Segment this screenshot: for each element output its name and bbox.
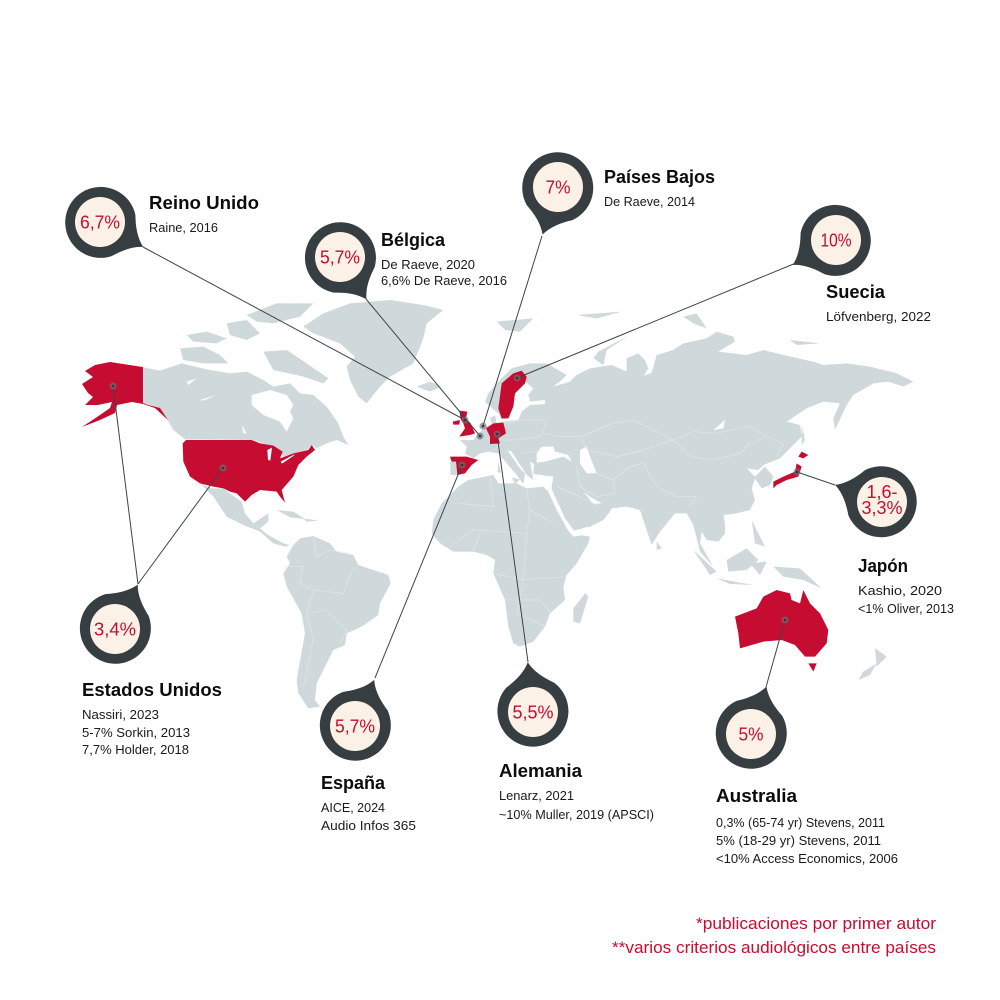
- label: Australia: <10% Access Economics, 2006: [716, 851, 898, 866]
- label: Suecia: Löfvenberg, 2022: [826, 309, 931, 324]
- label: Japón: <1% Oliver, 2013: [858, 601, 954, 616]
- pin: Estados Unidos: [68, 568, 169, 676]
- highlighted: contiguous United States: [183, 440, 315, 503]
- pin: Japón: 1,6-: [866, 482, 898, 502]
- label: Bélgica: De Raeve, 2020: [381, 257, 475, 272]
- country borders: [450, 420, 783, 627]
- label: Bélgica: [381, 230, 507, 288]
- Great Lakes: [267, 448, 295, 464]
- connector lines: [113, 236, 835, 687]
- South America borders: [283, 537, 353, 687]
- pin: Bélgica: [292, 209, 397, 318]
- land: Americas and Greenland: [143, 300, 443, 708]
- pin: Alemania: [492, 659, 572, 750]
- pin: Australia: 5%: [738, 724, 764, 744]
- label: Japón: Japón: [858, 556, 908, 576]
- label: Países Bajos: [604, 167, 715, 209]
- label: Suecia: Suecia: [826, 282, 886, 302]
- pin: Australia: [707, 675, 800, 778]
- label: Estados Unidos: 7,7% Holder, 2018: [82, 742, 189, 757]
- label: Reino Unido: Reino Unido: [149, 193, 259, 213]
- highlighted: Europe, Japan, Australia: [450, 371, 828, 672]
- label: Australia: 0,3% (65-74 yr) Stevens, 2011: [716, 815, 885, 830]
- label: Australia: Australia: [716, 786, 798, 806]
- label: Alemania: Lenarz, 2021: [499, 788, 574, 803]
- label: Japón: [858, 556, 954, 616]
- footnotes: [612, 914, 936, 957]
- label: Estados Unidos: Nassiri, 2023: [82, 707, 159, 722]
- label: Australia: 5% (18-29 yr) Stevens, 2011: [716, 833, 881, 848]
- label: Países Bajos: Países Bajos: [604, 167, 715, 187]
- highlighted: Alaska: [82, 362, 168, 427]
- footnotes: **varios criterios audiológicos entre países: [612, 938, 936, 957]
- label: España: AICE, 2024: [321, 800, 385, 815]
- label: Bélgica: 6,6% De Raeve, 2016: [381, 273, 507, 288]
- label: Alemania: ~10% Muller, 2019 (APSCI): [499, 807, 654, 822]
- location markers: [110, 374, 800, 624]
- world map: [82, 300, 913, 708]
- seas and inland water: [537, 420, 725, 537]
- label: Alemania: [499, 761, 654, 822]
- label: España: [321, 773, 416, 833]
- label: España: España: [321, 773, 386, 793]
- pin: Suecia: 10%: [820, 230, 852, 250]
- pin: Países Bajos: [509, 143, 602, 246]
- pin: Países Bajos: 7%: [546, 178, 570, 198]
- pin: Estados Unidos: 3,4%: [94, 620, 136, 640]
- pin: Reino Unido: [52, 174, 161, 278]
- footnotes: *publicaciones por primer autor: [696, 914, 936, 933]
- label: Alemania: Alemania: [499, 761, 583, 781]
- label: Estados Unidos: Estados Unidos: [82, 680, 222, 700]
- pin: Reino Unido: 6,7%: [80, 212, 120, 232]
- label: España: Audio Infos 365: [321, 818, 416, 833]
- pin: Bélgica: 5,7%: [320, 248, 360, 268]
- label: Países Bajos: De Raeve, 2014: [604, 194, 695, 209]
- pin: Japón: [823, 452, 927, 547]
- label: Japón: Kashio, 2020: [858, 583, 942, 598]
- pin: Suecia: [775, 192, 884, 296]
- label: Suecia: [826, 282, 931, 324]
- pin: España: 5,7%: [335, 716, 375, 736]
- label: Estados Unidos: [82, 680, 222, 757]
- lakes and Hudson Bay: [187, 378, 293, 433]
- pin: Japón: 3,3%: [862, 498, 902, 518]
- label: Reino Unido: Raine, 2016: [149, 220, 218, 235]
- label: Estados Unidos: 5-7% Sorkin, 2013: [82, 725, 190, 740]
- pin: España: [309, 666, 407, 772]
- land: Eurasia, Africa, Oceania: [432, 312, 913, 680]
- label: Australia: [716, 786, 898, 866]
- label: Bélgica: Bélgica: [381, 230, 446, 250]
- label: Reino Unido: [149, 193, 259, 235]
- pin: Alemania: 5,5%: [512, 702, 554, 722]
